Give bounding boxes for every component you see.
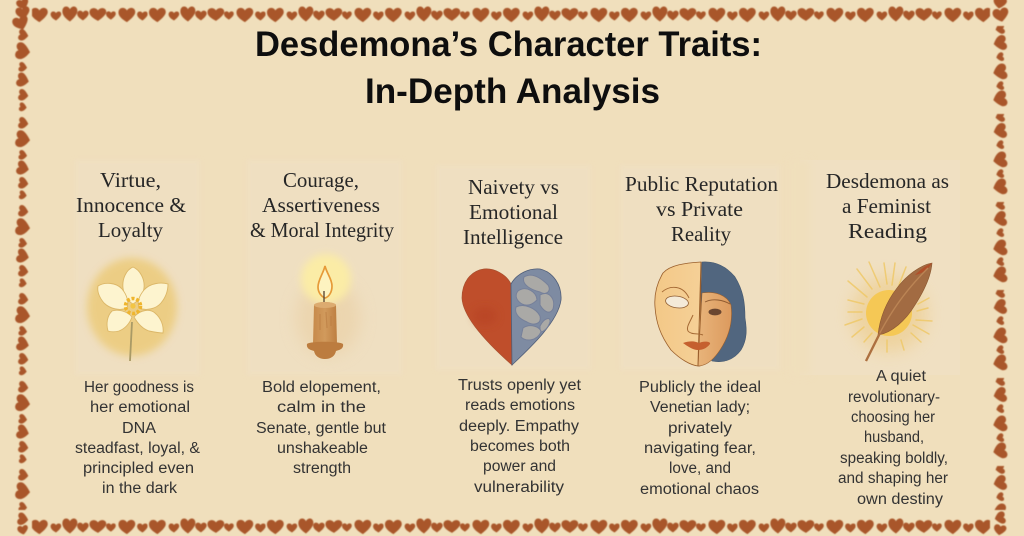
- heading: feminist reading: Reading: [848, 219, 927, 243]
- text: virtue: [75, 379, 201, 497]
- heading: naivety: [463, 175, 563, 249]
- heading: feminist reading: a Feminist: [842, 194, 931, 218]
- text: courage: Senate, gentle but: [256, 420, 387, 437]
- text: feminist reading: speaking boldly,: [840, 450, 948, 467]
- heading: virtue: [76, 168, 186, 242]
- heading: virtue: Loyalty: [98, 218, 163, 242]
- text: public reputation: love, and: [669, 460, 731, 477]
- icon: half heart half brain: [462, 269, 561, 365]
- panel: courage: [247, 160, 402, 477]
- text: feminist reading: A quiet: [876, 368, 927, 385]
- text: naivety: vulnerability: [474, 479, 564, 496]
- text: courage: [256, 379, 387, 477]
- icon: candle: [296, 254, 360, 359]
- icon: white flower: [87, 258, 177, 361]
- title: [255, 25, 762, 111]
- text: courage: strength: [293, 460, 351, 477]
- heading: courage: & Moral Integrity: [250, 218, 394, 242]
- heading: public reputation: Reality: [671, 222, 731, 246]
- text: naivety: Trusts openly yet: [458, 377, 582, 394]
- heading: naivety: Naivety vs: [468, 175, 559, 199]
- text: virtue: in the dark: [102, 480, 177, 497]
- text: feminist reading: own destiny: [857, 491, 943, 508]
- text: feminist reading: choosing her: [851, 409, 935, 426]
- heading: public reputation: [625, 172, 778, 246]
- text: public reputation: navigating fear,: [644, 440, 756, 457]
- heading: courage: Courage,: [283, 168, 359, 192]
- text: naivety: power and: [483, 458, 556, 475]
- heading: courage: Assertiveness: [262, 193, 380, 217]
- heading: naivety: Emotional: [469, 200, 558, 224]
- heading: feminist reading: [826, 169, 949, 243]
- icon: half mask half face: [655, 262, 746, 366]
- text: naivety: becomes both: [470, 438, 570, 455]
- heading: public reputation: Public Reputation: [625, 172, 778, 196]
- panel: feminist reading: [790, 160, 960, 508]
- text: feminist reading: revolutionary-: [848, 389, 940, 406]
- heading: naivety: Intelligence: [463, 225, 563, 249]
- text: virtue: Her goodness is: [84, 379, 194, 396]
- icon: feather and sun: [845, 262, 932, 361]
- text: public reputation: [639, 379, 761, 498]
- heading: virtue: Innocence &: [76, 193, 186, 217]
- text: feminist reading: and shaping her: [838, 470, 948, 487]
- text: feminist reading: [838, 368, 948, 508]
- text: naivety: deeply. Empathy: [459, 418, 579, 435]
- heading: feminist reading: Desdemona as: [826, 169, 949, 193]
- text: virtue: principled even: [83, 460, 194, 477]
- text: naivety: [458, 377, 582, 496]
- title: In-Depth Analysis: [365, 72, 660, 111]
- text: public reputation: emotional chaos: [640, 481, 759, 498]
- panel: naivety: [436, 165, 591, 496]
- text: public reputation: privately: [668, 420, 732, 437]
- text: courage: calm in the: [277, 399, 366, 416]
- text: courage: Bold elopement,: [262, 379, 381, 396]
- panel: public reputation: [620, 165, 780, 498]
- text: virtue: steadfast, loyal, &: [75, 440, 201, 457]
- text: virtue: her emotional: [90, 399, 190, 416]
- text: courage: unshakeable: [277, 440, 368, 457]
- panel: virtue: [75, 160, 201, 497]
- text: naivety: reads emotions: [465, 397, 575, 414]
- heading: public reputation: vs Private: [656, 197, 743, 221]
- text: public reputation: Publicly the ideal: [639, 379, 761, 396]
- heading: virtue: Virtue,: [100, 168, 161, 192]
- text: feminist reading: husband,: [864, 429, 924, 446]
- heading: courage: [250, 168, 394, 242]
- text: public reputation: Venetian lady;: [650, 399, 750, 416]
- title: Desdemona’s Character Traits:: [255, 25, 762, 64]
- text: virtue: DNA: [122, 420, 157, 437]
